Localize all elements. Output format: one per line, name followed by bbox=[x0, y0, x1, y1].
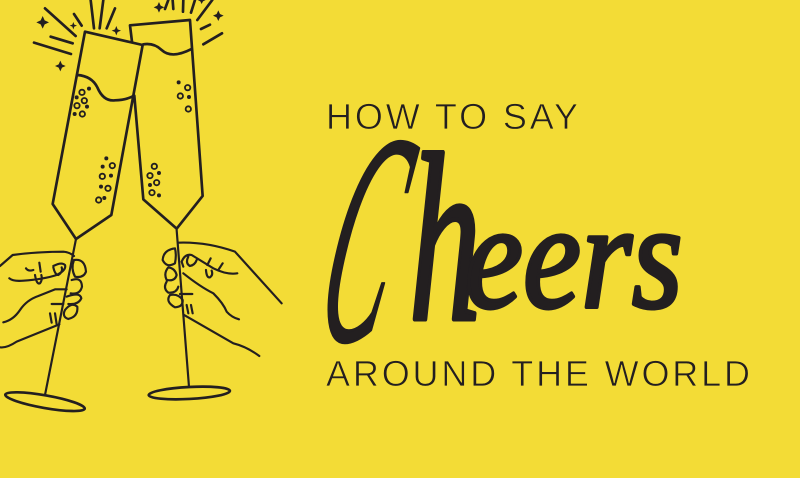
illustration: two clinking champagne flutes held by hands bbox=[0, 0, 282, 415]
subheading: around the world: AROUND THE WORLD bbox=[326, 353, 750, 394]
left flute bbox=[53, 32, 143, 239]
title lettering: Cheers: C bbox=[298, 74, 436, 406]
left hand and stem bbox=[0, 239, 86, 415]
heading: how to say: HOW TO SAY bbox=[326, 96, 578, 137]
right flute bbox=[130, 20, 203, 229]
title lettering: Cheers bbox=[298, 74, 683, 406]
title lettering: Cheers: eers bbox=[465, 172, 683, 340]
title lettering: Cheers: h bbox=[409, 106, 481, 371]
right hand and stem bbox=[148, 230, 282, 401]
sparkle rays and stars bbox=[34, 0, 224, 71]
